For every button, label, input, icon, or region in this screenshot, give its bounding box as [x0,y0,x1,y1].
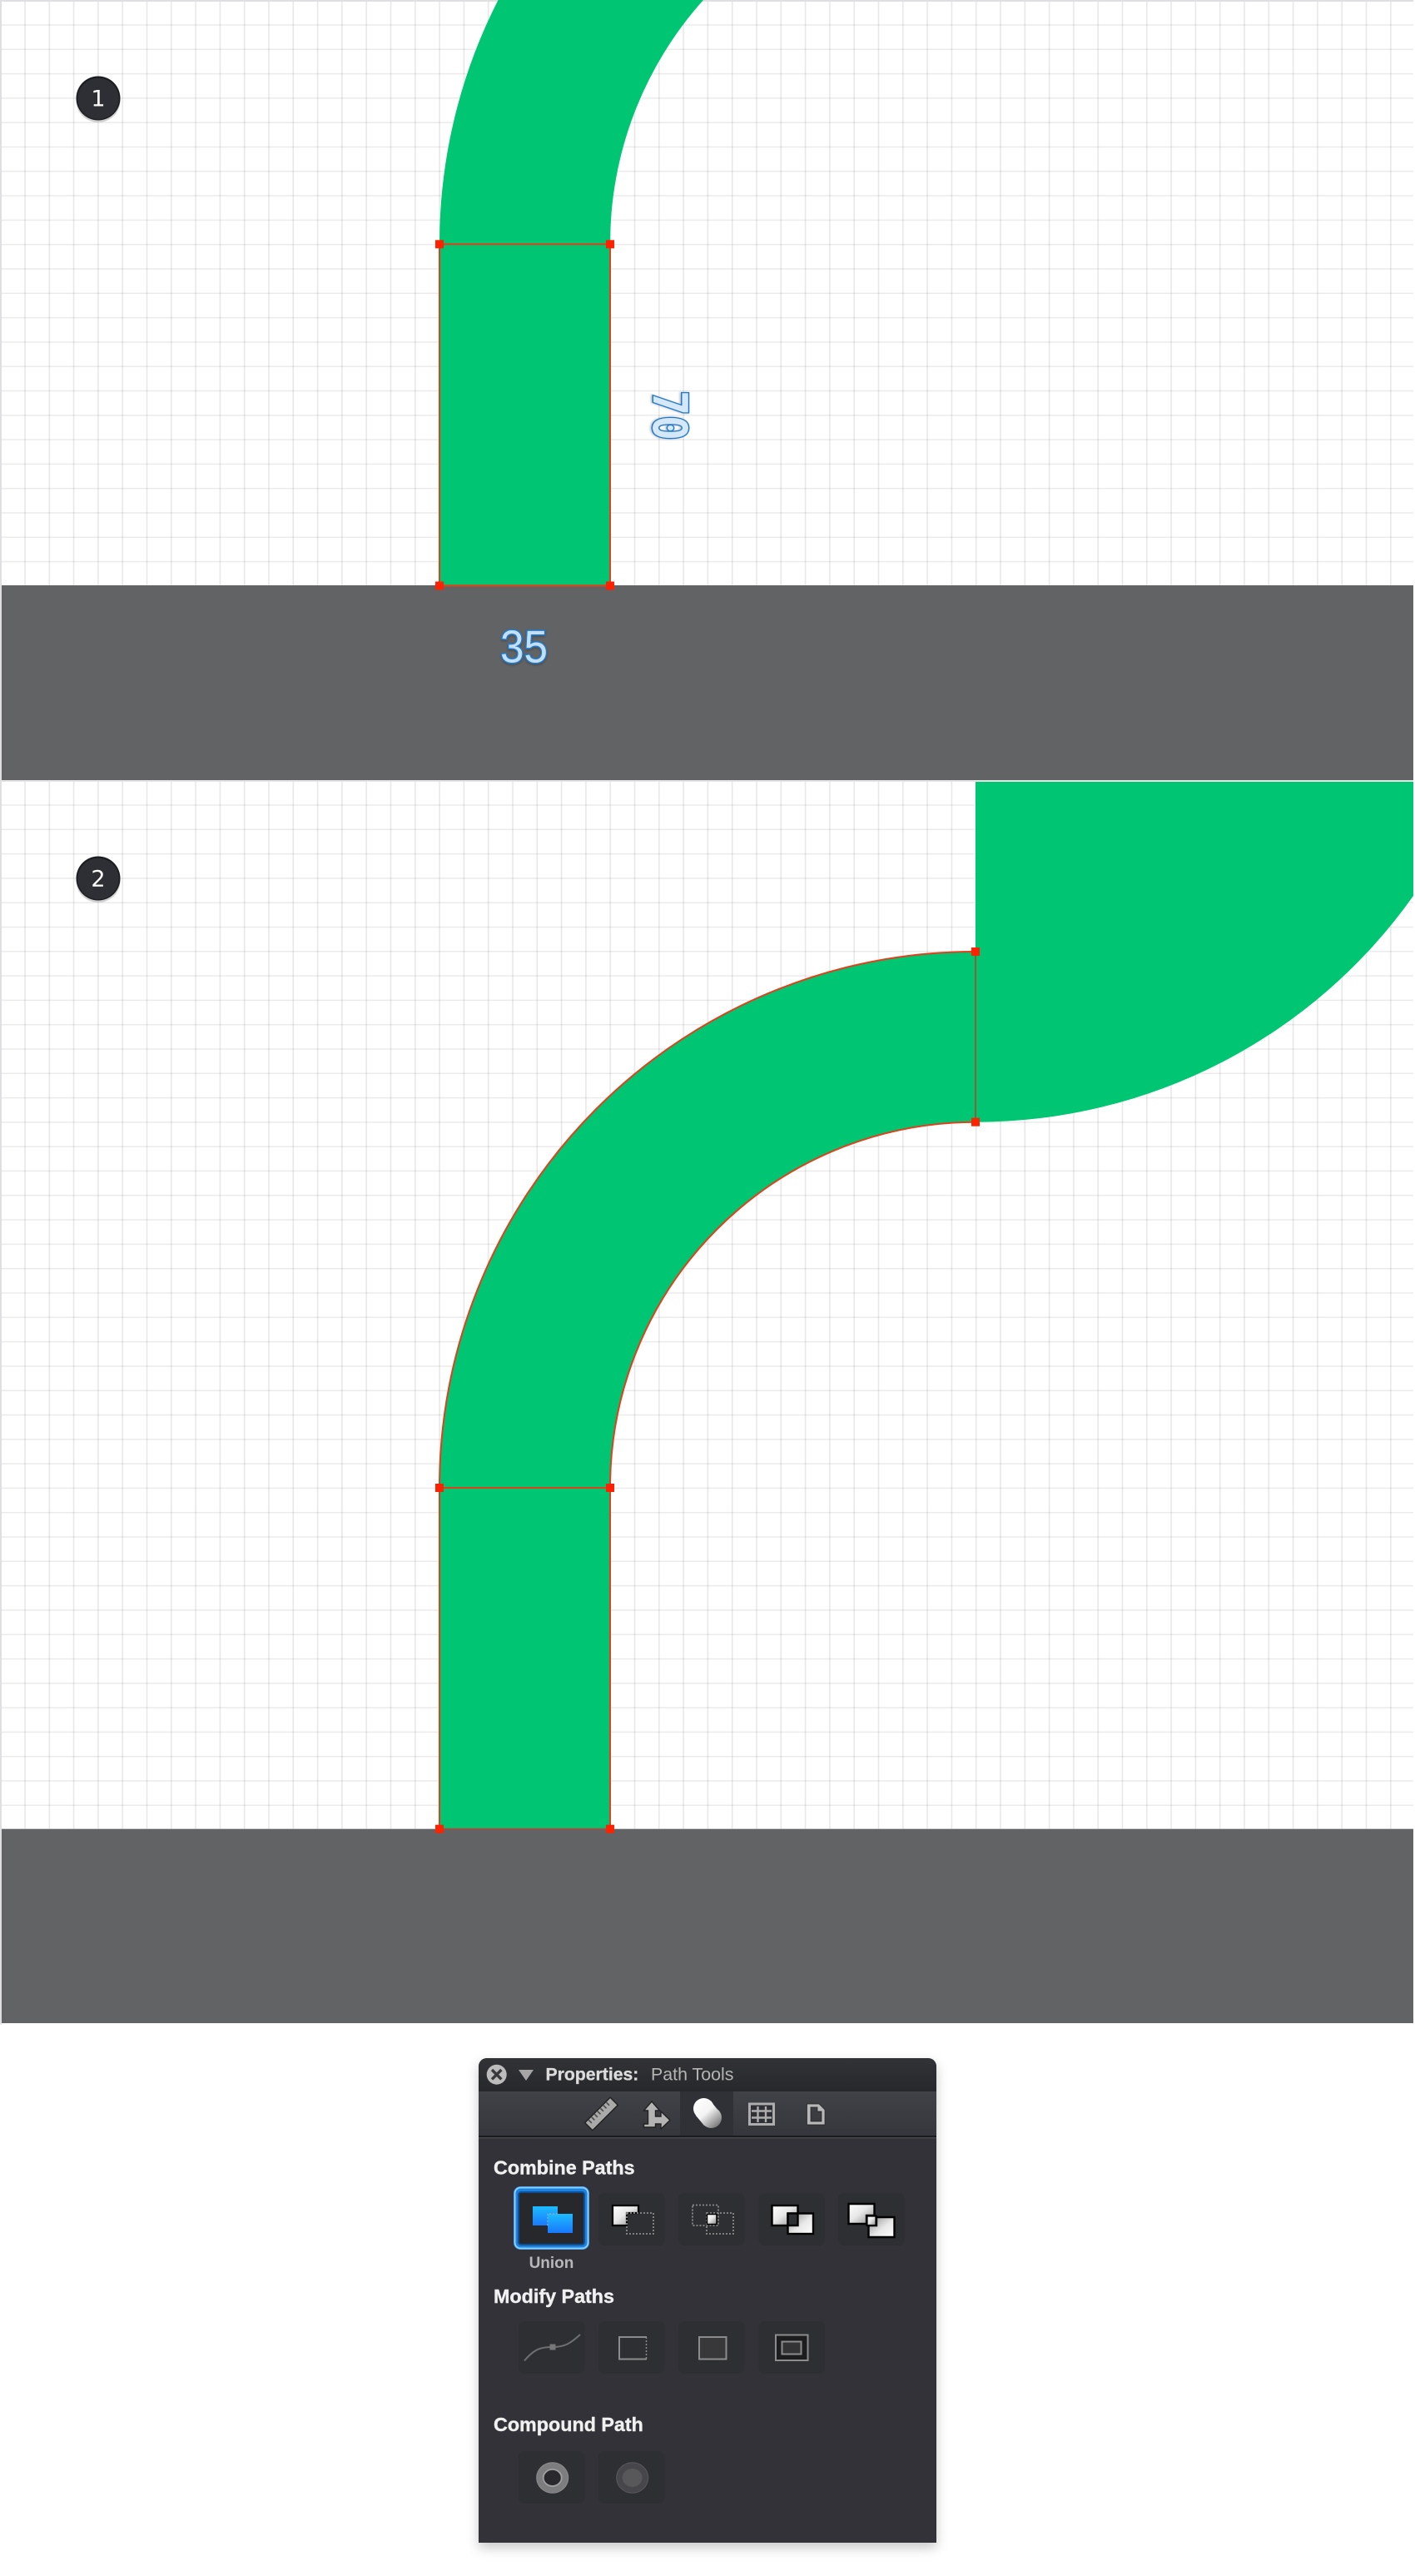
button: nested rectangles [759,2321,825,2374]
green rectangle: step 2 [439,1488,610,1829]
heading: combine paths: Combine Paths [494,2156,635,2178]
title value text: Path Tools [651,2065,734,2085]
badge: step number 2 [77,856,120,903]
button: subtract [598,2193,664,2245]
green curved path with selection outline [439,952,976,1488]
bottom edge line of rectangle [439,584,610,586]
button: make compound [519,2451,584,2504]
badge: step number 1: 1 [91,87,106,112]
title text: Properties: [546,2065,638,2085]
grey base bar: step 2 [2,1829,1413,2023]
panel: step 1 [0,0,1413,782]
title bar [479,2058,936,2091]
dimension label: 35: 35 [500,621,548,673]
panel body [479,2058,936,2543]
button: filled rectangle [678,2321,744,2374]
green curved path: step 1 [439,0,703,244]
icon: combine circles [693,2098,722,2128]
button: curve node [519,2321,584,2374]
heading: modify paths: Modify Paths [494,2285,614,2307]
badge: step number 2: 2 [91,866,106,893]
panel: step 2 [0,780,1413,2025]
selection anchors: step 1 [435,240,614,589]
icon: page [807,2104,825,2125]
heading: compound path: Compound Path [494,2414,643,2435]
large green quarter shape [976,782,1413,1122]
grey base bar: step 1 [2,585,1413,780]
button: release compound [598,2451,664,2504]
button: intersect [678,2193,744,2245]
dimension label: 70: 70 [642,390,697,440]
selection anchors: step 2 [435,947,980,1833]
icon: close button [487,2065,507,2085]
button: union selected [514,2186,589,2250]
icon: grid [749,2104,774,2125]
icon: ruler [585,2097,618,2131]
icon: move axes [644,2101,670,2129]
icon: collapse triangle [519,2070,534,2081]
grid background: step 1 [0,0,1413,782]
grid background: step 2 [0,780,1413,2025]
vertical seam line [975,952,976,1122]
panel: properties path tools [479,2058,936,2543]
toolbar [479,2091,936,2138]
badge: step number 1 [77,77,120,122]
button: exclude [759,2193,825,2245]
label: union: Union [529,2255,573,2272]
green rectangle with selection outline [439,244,610,585]
button: divide [838,2193,904,2245]
button: open rectangle [598,2321,664,2374]
